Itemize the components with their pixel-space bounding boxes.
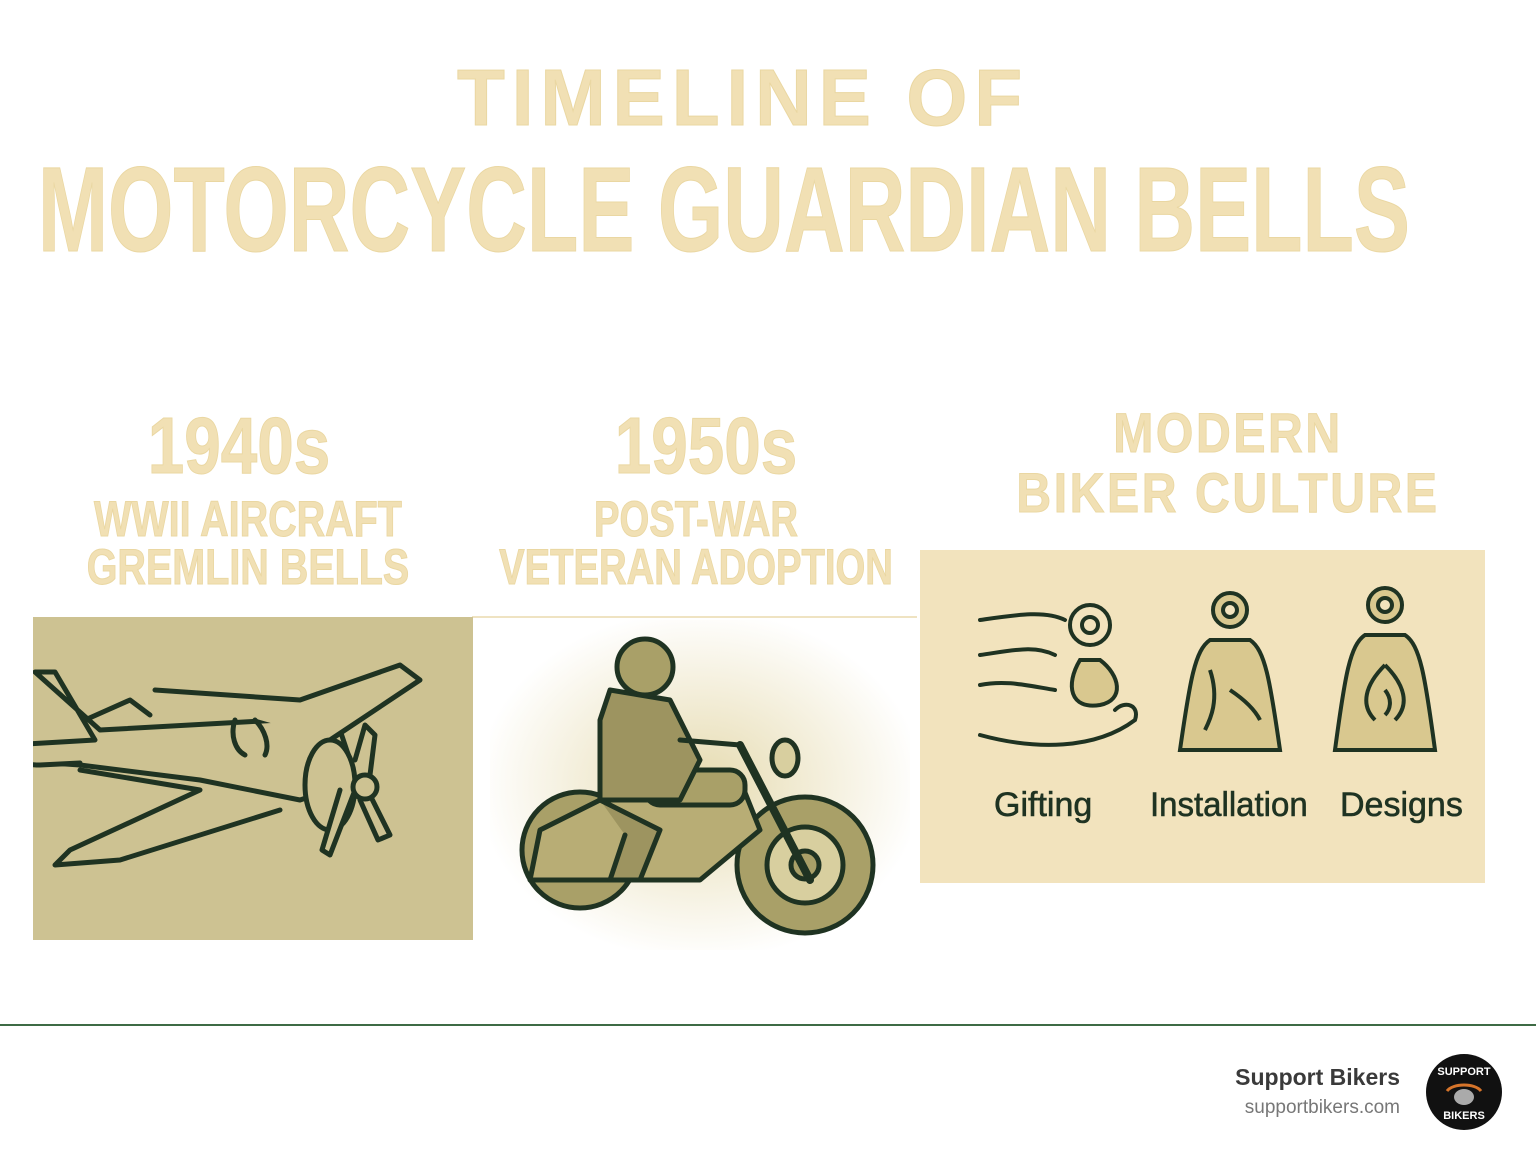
divider line xyxy=(472,616,917,618)
label: Installation: Installation xyxy=(1150,786,1308,824)
logo: Support Bikers badge: BIKERS xyxy=(1443,1110,1485,1122)
subtitle 1940s: GREMLIN BELLS xyxy=(87,539,409,595)
icon: designs bell xyxy=(1332,586,1438,752)
era heading 1950s: 1950s xyxy=(615,401,797,490)
panel: 1940s aircraft xyxy=(33,617,473,940)
label: Gifting: Gifting xyxy=(994,786,1092,824)
footer brand text: Support Bikers xyxy=(1235,1064,1400,1090)
logo: Support Bikers badge xyxy=(1426,1054,1502,1130)
icon: aircraft xyxy=(33,662,422,868)
title line 2: MOTORCYCLE GUARDIAN BELLS xyxy=(38,141,1410,277)
era heading modern xyxy=(1016,401,1440,524)
subtitle 1950s: POST-WAR xyxy=(594,491,798,547)
footer rule xyxy=(0,1024,1536,1026)
icon: gifting hand xyxy=(978,603,1138,747)
icon: motorcycle rider xyxy=(520,636,876,936)
subtitle 1950s xyxy=(498,491,893,595)
era heading modern: MODERN xyxy=(1113,401,1343,464)
subtitle 1950s: VETERAN ADOPTION xyxy=(499,539,893,595)
footer brand text xyxy=(1235,1064,1400,1118)
label: Designs: Designs xyxy=(1340,786,1463,824)
footer brand text: supportbikers.com xyxy=(1245,1097,1400,1118)
panel: 1950s motorcycle xyxy=(490,620,910,950)
panel: modern biker culture xyxy=(920,550,1485,883)
subtitle 1940s: WWII AIRCRAFT xyxy=(94,491,402,547)
subtitle 1940s xyxy=(87,491,409,595)
title line 1: TIMELINE OF xyxy=(457,53,1029,142)
icon: installation bell xyxy=(1178,591,1282,752)
logo: Support Bikers badge: SUPPORT xyxy=(1437,1066,1491,1078)
era heading 1940s: 1940s xyxy=(148,401,330,490)
era heading modern: BIKER CULTURE xyxy=(1016,461,1440,524)
